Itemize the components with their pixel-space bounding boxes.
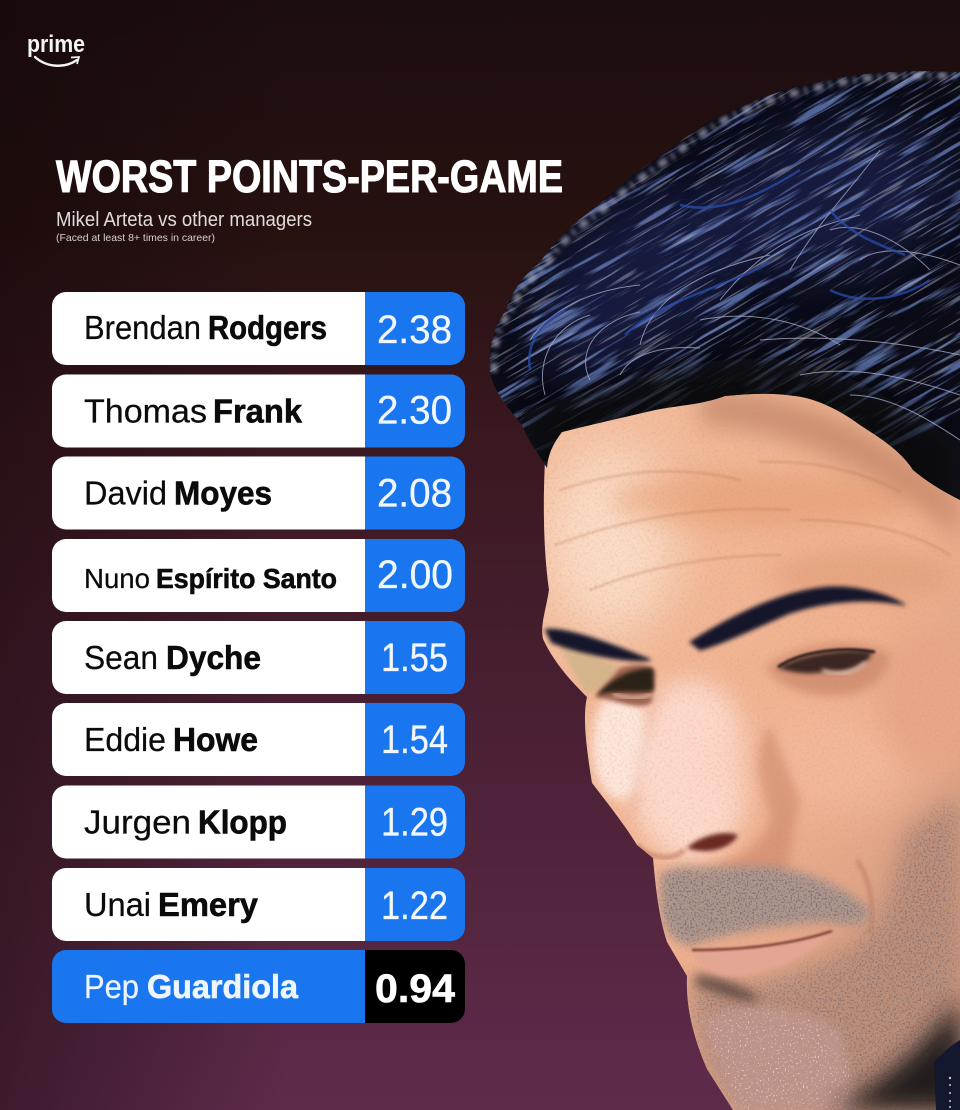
manager name: Howe bbox=[173, 721, 258, 758]
value: 0.94 bbox=[375, 967, 456, 1011]
table row highlighted: Pep Guardiola bbox=[52, 950, 465, 1023]
manager name: Pep bbox=[84, 968, 139, 1005]
value cell bbox=[365, 539, 465, 612]
manager name: Unai bbox=[84, 886, 151, 923]
hair highlights along crown bbox=[494, 75, 960, 372]
watermark dots bbox=[949, 1077, 951, 1108]
manager name: Jurgen bbox=[84, 804, 191, 840]
manager name: Espírito Santo bbox=[156, 563, 337, 594]
individual strands bbox=[530, 150, 960, 440]
neck shadow bbox=[830, 1000, 960, 1110]
manager name: Eddie bbox=[84, 721, 166, 758]
title: WORST POINTS-PER-GAME bbox=[56, 151, 563, 202]
subtitle: Mikel Arteta vs other managers bbox=[56, 209, 312, 231]
table row: Eddie Howe bbox=[52, 703, 465, 776]
value: 1.29 bbox=[381, 800, 448, 844]
value: 2.00 bbox=[377, 553, 453, 597]
value cell bbox=[365, 374, 465, 448]
moustache stubble bbox=[655, 860, 872, 952]
value cell bbox=[365, 868, 465, 941]
nose shading bbox=[718, 728, 802, 870]
manager name: Thomas bbox=[84, 392, 207, 430]
name bar bbox=[52, 868, 365, 941]
value: 2.08 bbox=[377, 472, 452, 516]
manager name: Frank bbox=[213, 392, 303, 430]
right eye bbox=[778, 650, 875, 673]
right eye socket bbox=[765, 643, 890, 696]
right eyebrow bbox=[690, 587, 905, 650]
manager name: Rodgers bbox=[208, 309, 327, 346]
name bar bbox=[52, 456, 365, 530]
name bar bbox=[52, 703, 365, 776]
manager name: David bbox=[84, 474, 167, 512]
value cell bbox=[365, 292, 465, 365]
value: 1.22 bbox=[381, 884, 448, 928]
value: 2.38 bbox=[377, 308, 452, 352]
jaw and chin stubble bbox=[687, 790, 960, 1110]
table row: Thomas Frank bbox=[52, 374, 465, 448]
lips bbox=[696, 936, 826, 978]
forehead wrinkles bbox=[555, 462, 950, 590]
manager name: Sean bbox=[84, 639, 158, 676]
jacket collar bbox=[934, 1040, 960, 1110]
table row: Jurgen Klopp bbox=[52, 786, 465, 858]
manager name: Dyche bbox=[166, 639, 261, 676]
footnote: (Faced at least 8+ times in career) bbox=[56, 232, 215, 244]
name bar bbox=[52, 292, 365, 365]
value: 2.30 bbox=[377, 388, 452, 432]
manager name: Brendan bbox=[84, 309, 201, 346]
value: 1.55 bbox=[381, 636, 448, 680]
value cell bbox=[365, 703, 465, 776]
table row: Unai Emery bbox=[52, 868, 465, 941]
name bar bbox=[52, 950, 365, 1023]
value cell bbox=[365, 621, 465, 694]
table row: Sean Dyche bbox=[52, 621, 465, 694]
icon: prime logo: prime bbox=[27, 31, 85, 58]
name bar bbox=[52, 621, 365, 694]
value cell bbox=[365, 950, 465, 1023]
value: 1.54 bbox=[381, 718, 448, 762]
left eye socket bbox=[562, 648, 620, 694]
name bar bbox=[52, 539, 365, 612]
name bar bbox=[52, 374, 365, 448]
value cell bbox=[365, 456, 465, 530]
manager name: Nuno bbox=[84, 563, 150, 594]
table row: Brendan Rodgers bbox=[52, 292, 465, 365]
manager name: Klopp bbox=[198, 804, 287, 840]
manager name: Emery bbox=[158, 886, 259, 923]
value cell bbox=[365, 786, 465, 858]
table row: Nuno Espírito Santo bbox=[52, 539, 465, 612]
left eye bbox=[596, 668, 654, 698]
hair bbox=[490, 71, 960, 500]
table row: David Moyes bbox=[52, 456, 465, 530]
portrait: Mikel Arteta bbox=[490, 71, 960, 1110]
left eyebrow bbox=[546, 630, 650, 660]
manager name: Moyes bbox=[174, 474, 272, 512]
manager name: Guardiola bbox=[147, 968, 299, 1005]
face skin bbox=[530, 380, 960, 1110]
name bar bbox=[52, 786, 365, 858]
